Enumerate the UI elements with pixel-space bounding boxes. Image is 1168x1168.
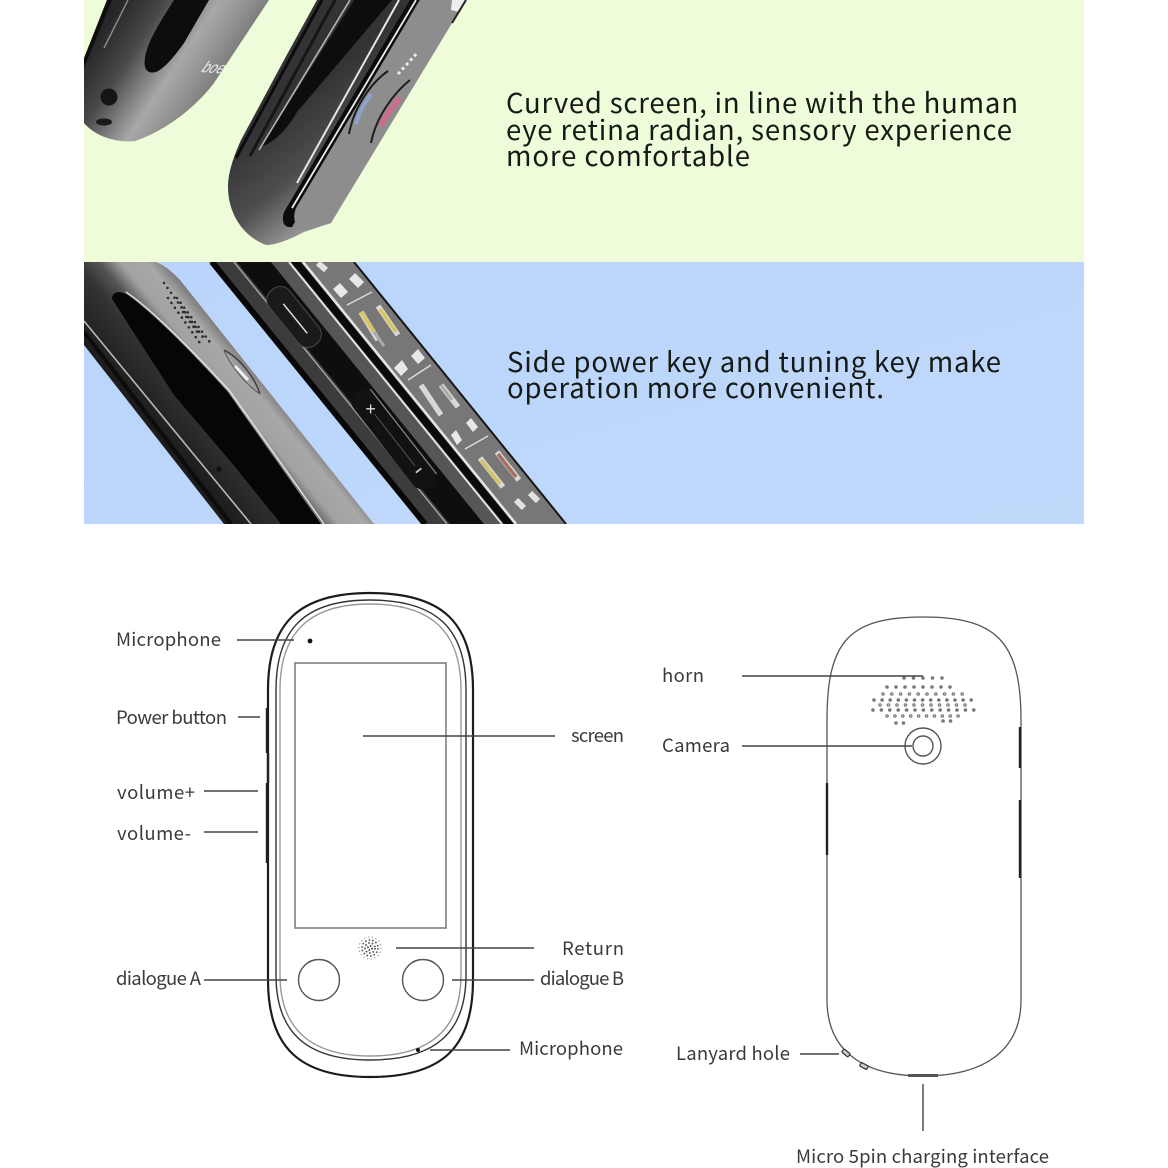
screen icons xyxy=(318,263,538,508)
label: volume-: volume- xyxy=(117,820,191,846)
panel: curved screen xyxy=(84,0,1084,262)
brand mark: boeen xyxy=(197,58,246,78)
icon: dialogue button A xyxy=(349,71,388,134)
photo: device bottom front view xyxy=(228,0,468,245)
label: dialogue A: dialogue A xyxy=(116,965,202,991)
photo: device rear side xyxy=(84,262,374,524)
device back outline xyxy=(827,617,1021,1076)
panel: side keys xyxy=(84,262,1084,524)
label: Lanyard hole: Lanyard hole xyxy=(676,1040,790,1066)
icon: lanyard slot xyxy=(96,118,112,126)
side keys xyxy=(267,708,268,863)
icon: return button xyxy=(398,53,417,74)
label: Power button: Power button xyxy=(116,704,227,730)
text: curved screen caption: Curved screen, in line with the human xyxy=(506,81,1018,121)
label: screen: screen xyxy=(571,722,624,748)
icon: dialogue B button xyxy=(402,960,444,1000)
icon: lanyard holes xyxy=(842,1049,868,1070)
text: side key caption: Side power key and tuning key make xyxy=(507,340,1001,380)
label: volume+: volume+ xyxy=(117,779,195,805)
diagram: front of device xyxy=(116,593,624,1077)
icon: dialogue A button xyxy=(298,960,340,1000)
photo: device bottom rear view xyxy=(84,0,269,141)
label: Return: Return xyxy=(562,935,624,961)
label: horn: horn xyxy=(662,662,704,688)
screen outline xyxy=(295,663,446,928)
icon: camera hole xyxy=(100,88,118,106)
icon: volume key: + xyxy=(365,399,376,419)
icon: dialogue button B xyxy=(371,80,410,143)
icon: microphone dot top xyxy=(308,639,312,643)
icon: microphone dot bottom xyxy=(416,1048,420,1052)
diagram: back of device xyxy=(662,617,1049,1168)
text: curved screen caption: more comfortable xyxy=(506,134,750,174)
label: dialogue B: dialogue B xyxy=(540,965,624,991)
text: curved screen caption: eye retina radian, sensory experience xyxy=(506,108,1012,148)
icon: return button xyxy=(359,937,381,959)
label: Microphone bottom: Microphone xyxy=(519,1035,623,1061)
text: side key caption: operation more convenient. xyxy=(507,366,884,406)
icon: speaker holes xyxy=(873,678,974,723)
icon: charging port xyxy=(908,1074,938,1077)
icon: volume key xyxy=(352,388,438,490)
side keys xyxy=(827,727,1020,878)
icon: speaker holes xyxy=(164,283,212,346)
label: Microphone top: Microphone xyxy=(116,626,221,652)
icon: camera ring xyxy=(224,350,260,394)
icon: microphone dot xyxy=(216,466,222,472)
photo: device side with keys and screen xyxy=(209,262,566,524)
label: Camera: Camera xyxy=(662,732,730,758)
icon: camera xyxy=(905,728,941,764)
device front outline xyxy=(268,593,473,1077)
icon: power key xyxy=(266,286,322,348)
